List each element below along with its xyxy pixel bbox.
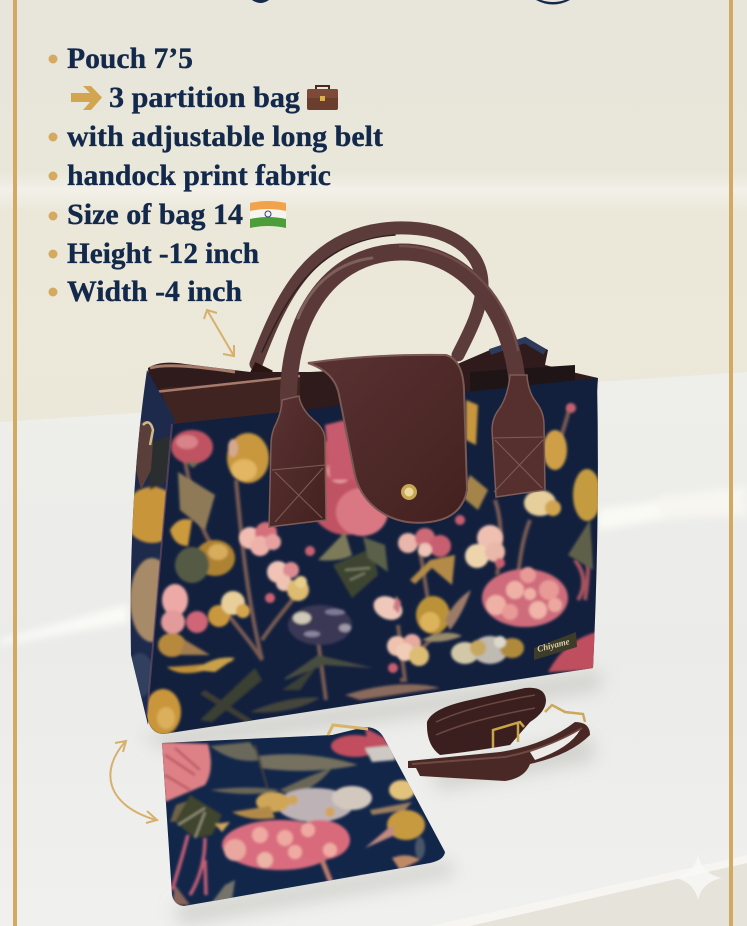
brass buckle <box>493 722 524 748</box>
pink and yellow blossom low centre <box>387 634 429 673</box>
pink blossoms upper left <box>239 522 281 556</box>
front handle <box>288 246 518 425</box>
sparkle watermark <box>675 855 722 900</box>
arrow: double-headed pointing to bag width <box>204 310 234 356</box>
pale blossom right <box>455 515 505 568</box>
handle tab: left <box>269 396 326 527</box>
handbag <box>124 228 610 740</box>
pink tulip <box>372 594 404 622</box>
pouch zip pull <box>328 725 368 735</box>
bullet: print fabric: handock print fabric <box>67 159 331 192</box>
brand patch: Chiyame <box>536 636 571 654</box>
dark leaves left <box>170 795 230 838</box>
shoulder strap <box>408 688 590 781</box>
pink cluster left edge <box>158 584 235 673</box>
shadow under bag and pouch <box>140 670 600 925</box>
border: right gold rule <box>729 0 733 926</box>
back handle <box>252 228 482 372</box>
inside of bag rim <box>148 338 598 424</box>
yellow tulip <box>227 433 269 483</box>
pink poppy <box>171 430 213 468</box>
title fragment cropped at top <box>252 0 570 4</box>
yellow tulips right <box>460 400 601 570</box>
side panel fabric <box>130 370 175 725</box>
long strap band <box>408 722 590 781</box>
strap opening <box>530 730 580 760</box>
front panel floral fabric <box>140 370 610 740</box>
grey-white flower cluster <box>451 636 524 664</box>
pink shell top left <box>160 742 211 802</box>
bullet: pouch: Pouch 7’5 <box>67 42 193 75</box>
floral pouch <box>162 723 445 906</box>
border: left gold rule <box>13 0 17 926</box>
handle tab: right <box>492 375 545 497</box>
big pink flower beneath flap <box>304 420 388 536</box>
pink stems lower left <box>172 835 206 895</box>
bullet: bag size with flag: Size of bag 14 <box>67 198 243 231</box>
fabric edge highlight <box>147 424 172 715</box>
arrow: curved pointing to pouch <box>110 741 157 823</box>
pink hydrangea lower centre <box>222 820 350 870</box>
brass hook <box>545 705 585 722</box>
pale yellow blossom <box>208 591 250 627</box>
olive leaves under flap <box>318 532 388 598</box>
bullet: partition bag with arrow and briefcase: 3 partition bag <box>109 81 300 114</box>
brand patch <box>534 632 577 660</box>
stems <box>185 405 588 700</box>
pink cluster and yellow foliage <box>398 528 455 585</box>
pink and yellow blossoms centre <box>265 546 315 603</box>
bullet: width: Width -4 inch <box>67 275 242 308</box>
bullet: height: Height -12 inch <box>67 237 259 270</box>
leather flap with snap <box>308 355 467 523</box>
grey leaves top <box>210 742 358 795</box>
feature list <box>48 42 383 308</box>
dark leaves lower left <box>200 668 320 724</box>
pink petal lower right <box>548 632 597 672</box>
dark purple flower <box>282 605 373 690</box>
yellow petal bottom left <box>145 689 181 735</box>
yellow tulip centre <box>416 590 471 642</box>
yellow blossoms right <box>365 780 425 870</box>
pink hydrangea <box>482 567 568 627</box>
purple-white cluster centre <box>232 786 372 822</box>
side buckle <box>136 421 154 490</box>
yellow rose and leaves left <box>170 472 235 583</box>
red flower top right <box>331 728 395 762</box>
bullet: adjustable belt: with adjustable long belt <box>67 120 383 153</box>
tan border bottom <box>345 684 440 700</box>
strap coil <box>427 688 546 755</box>
